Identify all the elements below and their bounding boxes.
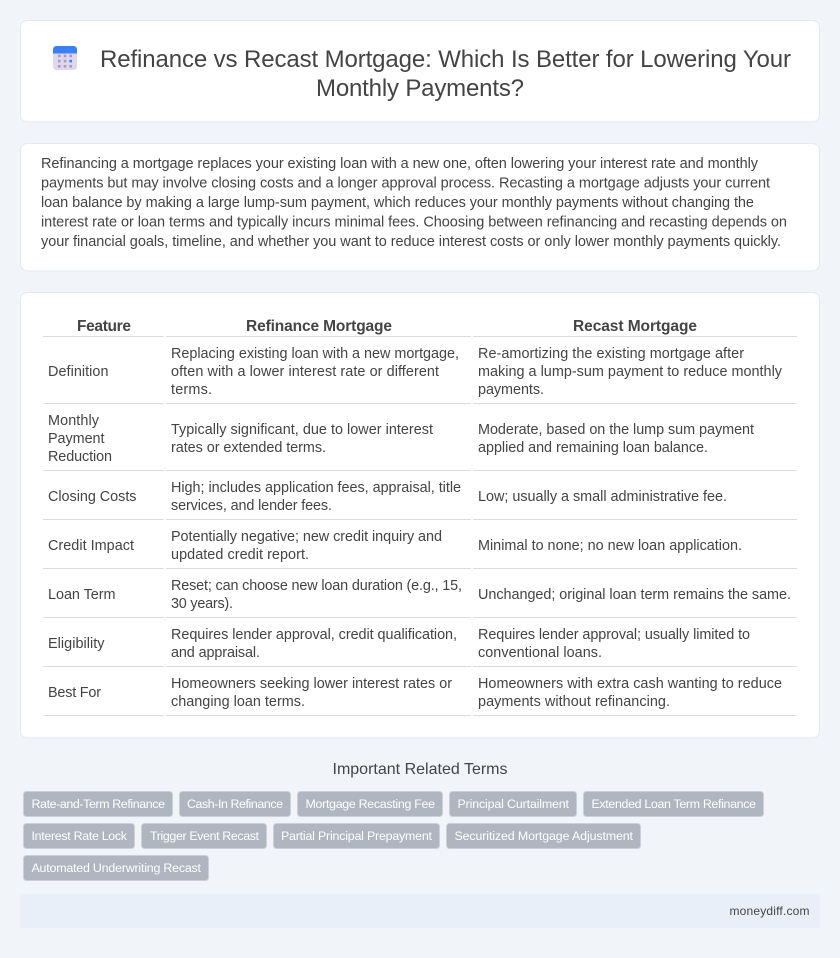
table row: definition: making a lump-sum payment to reduce monthly bbox=[478, 364, 783, 380]
footer bar: moneydiff.com bbox=[730, 904, 810, 918]
text block: introduction paragraph bbox=[41, 156, 787, 250]
table row: definition: terms. bbox=[171, 382, 212, 398]
table row: monthly payment reduction: applied and remaining loan balance. bbox=[478, 440, 708, 456]
table header row: Recast Mortgage bbox=[573, 318, 697, 335]
table row: monthly payment reduction: Monthly bbox=[48, 413, 100, 429]
table row: closing costs: Low; usually a small administrative fee. bbox=[478, 489, 727, 505]
table row: definition: Re-amortizing the existing mortgage after bbox=[478, 346, 744, 362]
icon: calendar bbox=[53, 46, 77, 70]
table row: eligibility: conventional loans. bbox=[478, 645, 602, 661]
table row: eligibility: Requires lender approval; usually limited to bbox=[478, 627, 750, 643]
table row: best for: Best For bbox=[48, 685, 101, 701]
text block: introduction paragraph: your financial goals, timeline, and whether you want to reduce interest costs or only lower monthly payments quickly. bbox=[41, 234, 781, 250]
tag: rate-and-term refinance: Rate-and-Term Refinance bbox=[32, 797, 165, 811]
table row: credit impact: Credit Impact bbox=[48, 538, 134, 554]
table row: definition: Replacing existing loan with a new mortgage, bbox=[171, 346, 459, 362]
table row: monthly payment reduction: Reduction bbox=[48, 449, 112, 465]
title: Monthly Payments? bbox=[316, 75, 524, 102]
tag: trigger event recast bbox=[142, 824, 266, 848]
table header row: Feature bbox=[77, 318, 131, 335]
table row: eligibility: Requires lender approval, credit qualification, bbox=[171, 627, 457, 643]
tag: principal curtailment bbox=[450, 792, 576, 816]
table row: eligibility: Eligibility bbox=[48, 636, 105, 652]
text block: introduction paragraph: loan balance by making a large lump-sum payment, which reduces your monthly payments without changing the bbox=[41, 195, 754, 211]
table row: credit impact: Minimal to none; no new loan application. bbox=[478, 538, 742, 554]
table row: loan term: Reset; can choose new loan duration (e.g., 15, bbox=[171, 578, 462, 594]
table row: closing costs: Closing Costs bbox=[48, 489, 136, 505]
table header row: Refinance Mortgage bbox=[246, 318, 392, 335]
table row: best for: Homeowners seeking lower interest rates or bbox=[171, 676, 452, 692]
tag: interest rate lock bbox=[24, 824, 134, 848]
table row: eligibility: and appraisal. bbox=[171, 645, 260, 661]
table row: definition: Definition bbox=[48, 364, 108, 380]
table row: definition bbox=[43, 346, 797, 404]
table row: loan term: 30 years). bbox=[171, 596, 233, 612]
tag: mortgage recasting fee: Mortgage Recasting Fee bbox=[306, 797, 435, 811]
table row: definition: payments. bbox=[478, 382, 544, 398]
title bbox=[100, 46, 791, 102]
table row: loan term: Unchanged; original loan term remains the same. bbox=[478, 587, 791, 603]
table row: monthly payment reduction bbox=[43, 413, 797, 471]
heading: important related terms: Important Related Terms bbox=[332, 761, 508, 778]
table row: credit impact: Potentially negative; new credit inquiry and bbox=[171, 529, 442, 545]
table row: best for: Homeowners with extra cash wanting to reduce bbox=[478, 676, 782, 692]
panel: title header bbox=[20, 20, 820, 122]
tag: automated underwriting recast bbox=[24, 856, 208, 880]
tag: securitized mortgage adjustment: Securitized Mortgage Adjustment bbox=[454, 829, 634, 843]
text block: introduction paragraph: payments but may involve closing costs and a longer approval process. Recasting a mortgage adjusts your current bbox=[41, 175, 770, 191]
tag: securitized mortgage adjustment bbox=[446, 824, 640, 848]
tag: automated underwriting recast: Automated Underwriting Recast bbox=[32, 861, 202, 875]
tag: rate-and-term refinance bbox=[24, 792, 172, 816]
table row: best for bbox=[43, 676, 797, 716]
table row: best for: changing loan terms. bbox=[171, 694, 305, 710]
table row: monthly payment reduction: Typically significant, due to lower interest bbox=[171, 422, 433, 438]
tag: extended loan term refinance: Extended Loan Term Refinance bbox=[592, 797, 756, 811]
tag: partial principal prepayment: Partial Principal Prepayment bbox=[281, 829, 433, 843]
tag: cash-in refinance: Cash-In Refinance bbox=[187, 797, 283, 811]
table row: closing costs: High; includes application fees, appraisal, title bbox=[171, 480, 461, 496]
table row: loan term bbox=[43, 578, 797, 618]
table row: credit impact: updated credit report. bbox=[171, 547, 309, 563]
table row: closing costs: services, and lender fees. bbox=[171, 498, 332, 514]
tag: cash-in refinance bbox=[180, 792, 290, 816]
tag: mortgage recasting fee bbox=[298, 792, 442, 816]
tag: partial principal prepayment bbox=[274, 824, 440, 848]
title: Refinance vs Recast Mortgage: Which Is Better for Lowering Your bbox=[100, 46, 791, 73]
table row: monthly payment reduction: Payment bbox=[48, 431, 104, 447]
table row: monthly payment reduction: Moderate, based on the lump sum payment bbox=[478, 422, 754, 438]
text block: introduction paragraph: interest rate or loan terms and typically incurs minimal fees. Choosing between refinancing and recasting depends on bbox=[41, 214, 787, 230]
tag: trigger event recast: Trigger Event Recast bbox=[150, 829, 260, 843]
table row: monthly payment reduction: rates or extended terms. bbox=[171, 440, 326, 456]
table row: definition: often with a lower interest rate or different bbox=[171, 364, 439, 380]
tag: principal curtailment: Principal Curtailment bbox=[458, 797, 570, 811]
table row: closing costs bbox=[43, 480, 797, 520]
tag: interest rate lock: Interest Rate Lock bbox=[32, 829, 128, 843]
panel: related term tags bbox=[24, 792, 764, 880]
panel: introduction bbox=[20, 144, 820, 271]
table row: loan term: Loan Term bbox=[48, 587, 116, 603]
panel: comparison table bbox=[20, 292, 820, 738]
text block: introduction paragraph: Refinancing a mortgage replaces your existing loan with a new one, often lowering your interest rate and monthly bbox=[41, 156, 759, 172]
table row: best for: payments without refinancing. bbox=[478, 694, 670, 710]
table row: eligibility bbox=[43, 627, 797, 667]
table header row bbox=[43, 318, 797, 337]
tag: extended loan term refinance bbox=[584, 792, 764, 816]
table row: credit impact bbox=[43, 529, 797, 569]
footer bar bbox=[20, 894, 820, 928]
